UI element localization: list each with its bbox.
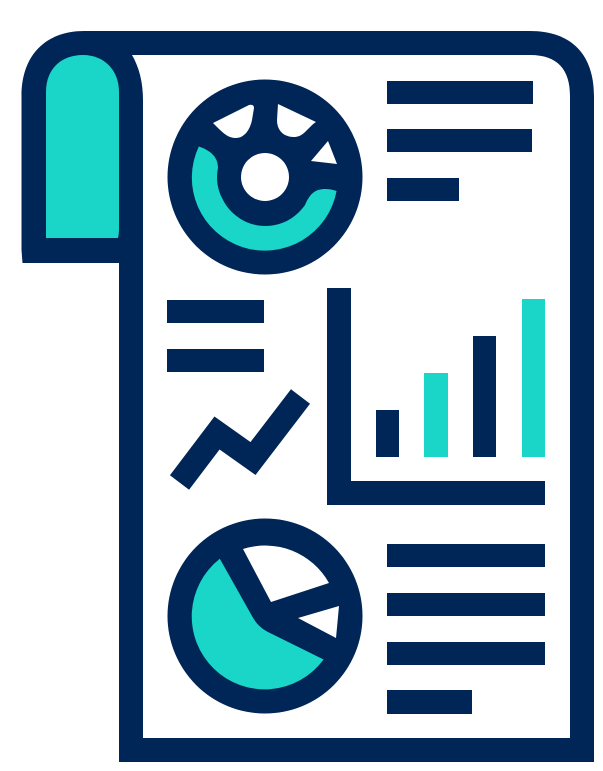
text lines bottom xyxy=(387,544,545,714)
slice: white large xyxy=(243,546,329,602)
slice: white small xyxy=(298,606,339,638)
text lines top xyxy=(387,81,533,201)
bar chart xyxy=(327,288,545,505)
segment: right triangle xyxy=(311,141,337,164)
slice: teal xyxy=(192,559,324,689)
segment: upper left xyxy=(213,105,254,138)
hub xyxy=(241,153,289,201)
bars xyxy=(376,410,399,457)
donut chart xyxy=(168,80,362,274)
pie chart xyxy=(168,518,362,714)
trend line xyxy=(180,396,300,482)
segment: teal arc xyxy=(192,146,337,251)
axes xyxy=(327,288,545,505)
text lines middle xyxy=(167,300,264,372)
segment: upper right xyxy=(277,104,316,137)
scroll curled flap xyxy=(46,55,119,238)
